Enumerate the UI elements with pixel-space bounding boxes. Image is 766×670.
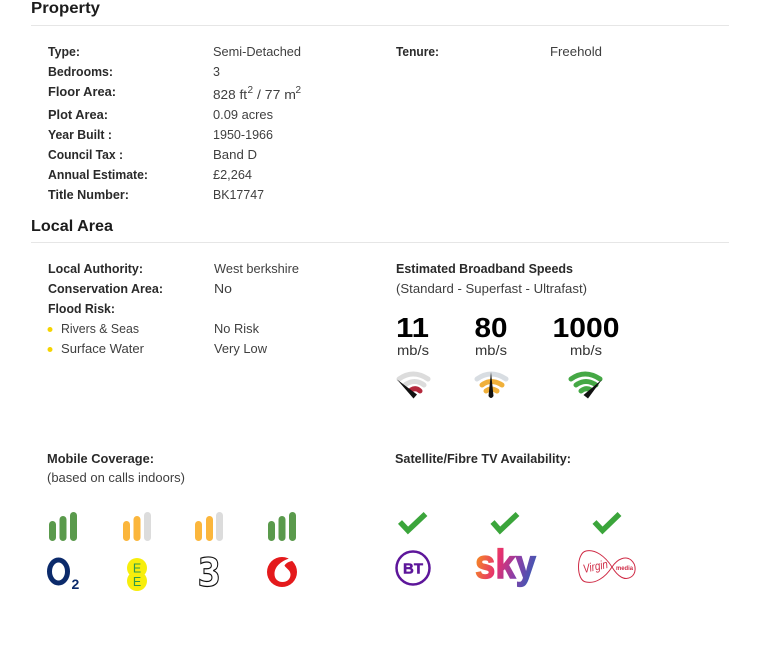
value: floor area: 828 ft <box>213 88 248 102</box>
subheading: mobile coverage: (based on calls indoors) <box>47 471 185 485</box>
icon: red gauge <box>397 374 428 398</box>
bullet: surface water <box>48 347 52 352</box>
logo: o2 <box>50 560 80 592</box>
panel: broadband speeds <box>396 262 620 398</box>
panel: mobile coverage <box>47 452 297 596</box>
heading: mobile coverage: Mobile Coverage: <box>47 452 154 466</box>
icon: check sky <box>492 514 518 530</box>
value: type: Semi-Detached <box>213 45 301 59</box>
label: conservation area: Conservation Area: <box>48 282 163 296</box>
speed: superfast: 80 <box>474 312 508 343</box>
label: council tax: Council Tax : <box>48 148 123 162</box>
speed: ultrafast: mb/s <box>570 342 602 358</box>
value: tenure: Freehold <box>550 45 602 59</box>
heading: property: Property <box>31 0 100 17</box>
label: plot area: Plot Area: <box>48 108 108 122</box>
logo: three: 3 <box>198 551 221 596</box>
logo: virgin media: Virgin <box>582 557 609 576</box>
subheading: broadband: (Standard - Superfast - Ultrafast) <box>396 282 587 296</box>
label: annual estimate: Annual Estimate: <box>48 168 148 182</box>
value: bedrooms: 3 <box>213 65 220 79</box>
value: surface water: Very Low <box>214 342 268 356</box>
label: year built: Year Built : <box>48 128 112 142</box>
icon: check bt <box>400 514 426 530</box>
speed: standard: mb/s <box>397 342 429 358</box>
icon: green gauge <box>571 374 602 398</box>
icon: o2 signal bars <box>49 512 77 541</box>
value: floor area <box>213 85 302 102</box>
value: local authority: West berkshire <box>214 262 299 276</box>
bullet: rivers and seas <box>48 327 52 332</box>
value: rivers and seas: No Risk <box>214 322 260 336</box>
value: floor area: / 77 m <box>257 88 296 102</box>
value: plot area: 0.09 acres <box>213 108 273 122</box>
label: type: Type: <box>48 45 80 59</box>
icon: check virgin <box>594 514 620 530</box>
panel: local area <box>31 218 729 356</box>
logo: o2: 2 <box>72 576 80 592</box>
value: year built: 1950-1966 <box>213 128 273 142</box>
heading: broadband: Estimated Broadband Speeds <box>396 262 573 276</box>
icon: ee signal bars <box>123 512 151 541</box>
speed: ultrafast: 1000 <box>552 312 620 343</box>
heading: local area: Local Area <box>31 218 113 235</box>
heading: tv availability: Satellite/Fibre TV Availability: <box>395 452 571 466</box>
logo: vodafone <box>267 557 297 587</box>
label: flood risk: Flood Risk: <box>48 302 115 316</box>
value: title number: BK17747 <box>213 188 264 202</box>
speed: standard: 11 <box>396 312 429 343</box>
speed: superfast <box>474 312 508 358</box>
value: conservation area: No <box>214 282 232 296</box>
speed: superfast: mb/s <box>475 342 507 358</box>
logo: virgin media: media <box>616 566 634 572</box>
logo: ee: E <box>133 562 141 576</box>
logo: ee <box>127 558 147 591</box>
value: council tax: Band D <box>213 148 257 162</box>
speed: ultrafast <box>552 312 620 358</box>
value: floor area: 2 <box>296 85 302 96</box>
panel: tv availability <box>395 452 635 587</box>
logo: ee: E <box>133 575 141 589</box>
logo: bt: BT <box>403 560 423 578</box>
icon: amber gauge <box>477 372 506 398</box>
panel: property <box>31 0 729 202</box>
label: tenure: Tenure: <box>396 45 439 59</box>
label: title number: Title Number: <box>48 188 129 202</box>
logo: bt <box>396 552 430 584</box>
logo: sky: sky <box>475 541 536 587</box>
label: floor area: Floor Area: <box>48 85 116 99</box>
icon: three signal bars <box>195 512 223 541</box>
logo: virgin media <box>578 551 635 582</box>
speed: standard <box>396 312 429 358</box>
value: annual estimate: £2,264 <box>213 168 252 182</box>
value: floor area: 2 <box>248 85 254 96</box>
label: local authority: Local Authority: <box>48 262 143 276</box>
label: bedrooms: Bedrooms: <box>48 65 113 79</box>
label: surface water: Surface Water <box>61 342 144 356</box>
label: rivers and seas: Rivers & Seas <box>61 322 139 336</box>
icon: vodafone signal bars <box>268 512 296 541</box>
